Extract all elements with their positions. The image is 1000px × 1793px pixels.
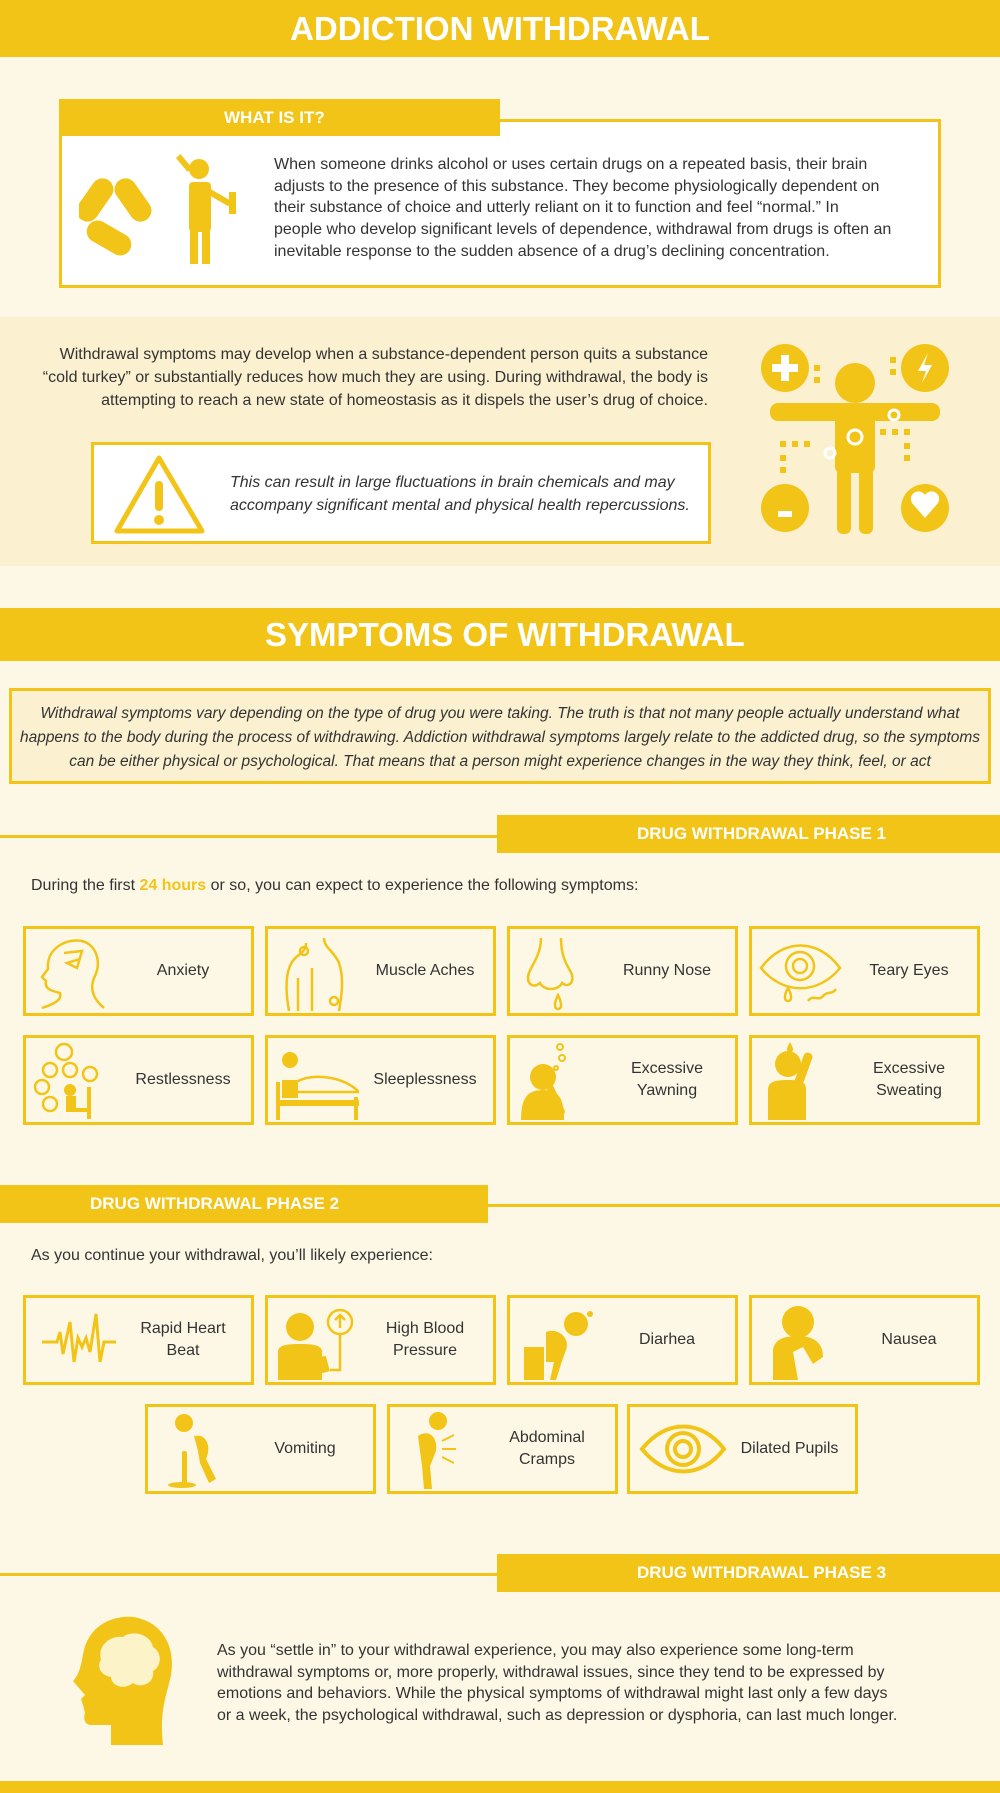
card: muscle aches: Muscle Aches [376,962,474,979]
heading: symptoms of withdrawal [0,608,1000,661]
text: withdrawal paragraph [43,346,708,409]
heading tab [59,99,500,136]
card: runny nose: Runny Nose [623,962,711,979]
text: withdrawal paragraph: Withdrawal symptoms may develop when a substance-dependent person quits a substance [60,346,708,363]
text: phase 1 intro: During the first 24 hours or so, you can expect to experience the following symptoms: [31,877,638,894]
text block: symptoms intro: Withdrawal symptoms vary depending on the type of drug you were taking. The truth is that not many people actually understand what [40,705,960,722]
text: what is it: people who develop significant levels of dependence, withdrawal from drugs is often an [274,221,891,238]
text: phase 3 [217,1642,897,1724]
callout: warning [91,442,711,544]
text: what is it: inevitable response to the sudden absence of a drug’s declining concentration. [274,243,830,260]
footer bar [0,1781,1000,1793]
symptom grid: phase 1 [23,926,980,1125]
card: excessive sweating: Sweating [876,1082,942,1099]
card: teary eyes: Teary Eyes [869,962,949,979]
card: muscle aches [265,926,496,1016]
text: phase 3: or a week, the psychological withdrawal, such as depression or dysphoria, can last much longer. [217,1707,897,1724]
text: what is it: When someone drinks alcohol or uses certain drugs on a repeated basis, their brain [274,156,867,173]
title bar: ADDICTION WITHDRAWAL [290,10,710,47]
card: dilated pupils [627,1404,858,1494]
card: vomiting [145,1404,376,1494]
text: phase 2 intro: As you continue your withdrawal, you’ll likely experience: [31,1247,433,1264]
heading tab: WHAT IS IT? [224,108,325,127]
card: excessive sweating: Excessive [873,1060,945,1077]
heading: phase 2 [0,1185,1000,1223]
card: teary eyes [749,926,980,1016]
card: rapid heart beat [23,1295,254,1385]
card: abdominal cramps: Cramps [519,1451,575,1468]
heading: symptoms of withdrawal: SYMPTOMS OF WITHDRAWAL [265,616,745,653]
title bar [0,0,1000,57]
card: rapid heart beat: Beat [167,1342,199,1359]
card: nausea [749,1295,980,1385]
card: abdominal cramps [387,1404,618,1494]
text: callout: accompany significant mental and physical health repercussions. [230,497,690,514]
card: rapid heart beat: Rapid Heart [140,1320,226,1337]
panel: what is it [59,99,941,288]
card: vomiting: Vomiting [274,1440,336,1457]
text: withdrawal paragraph: attempting to reach a new state of homeostasis as it dispels the user’s drug of choice. [101,392,708,409]
card: high blood pressure: Pressure [393,1342,457,1359]
text: what is it: their substance of choice and utterly reliant on it to function and feel “normal.” In [274,199,839,216]
text block: symptoms intro [9,688,991,784]
text: callout [230,474,690,514]
text: what is it [274,156,891,260]
card: diarhea [507,1295,738,1385]
icon: head with brain [73,1616,172,1745]
heading: phase 3: DRUG WITHDRAWAL PHASE 3 [637,1563,886,1582]
text block: symptoms intro: can be either physical or psychological. That means that a person might experience changes in the way they think, feel, or act [69,753,931,770]
card: anxiety: Anxiety [157,962,209,979]
text: what is it: adjusts to the presence of this substance. They become physiologically dependent on [274,178,879,195]
icon: warning triangle [114,456,204,534]
icon: pills and drinker [79,154,236,264]
text: phase 3: emotions and behaviors. While the physical symptoms of withdrawal might last only a few days [217,1685,888,1702]
panel: withdrawal band [0,317,1000,566]
card: anxiety [23,926,254,1016]
text: phase 3: withdrawal symptoms or, more properly, withdrawal issues, since they tend to be expressed by [217,1664,885,1681]
heading: phase 3 [0,1554,1000,1592]
card: restlessness [23,1035,254,1125]
text: withdrawal paragraph: “cold turkey” or substantially reduces how much they are using. During withdrawal, the body is [43,369,708,386]
card: diarhea: Diarhea [639,1331,695,1348]
text: callout: This can result in large fluctuations in brain chemicals and may [230,474,675,491]
heading: phase 1 [0,815,1000,853]
symptom grid: phase 2 [23,1295,980,1494]
text block: symptoms intro: happens to the body during the process of withdrawing. Addiction withdrawal symptoms largely relate to the addicted drug, so the symptoms [20,729,980,746]
card: high blood pressure [265,1295,496,1385]
card: restlessness: Restlessness [135,1071,231,1088]
card: excessive sweating [749,1035,980,1125]
box border [59,119,941,288]
card: sleeplessness [265,1035,496,1125]
card: runny nose [507,926,738,1016]
card: nausea: Nausea [881,1331,937,1348]
icon: body figure [761,344,949,534]
card: excessive yawning [507,1035,738,1125]
text: phase 3: As you “settle in” to your withdrawal experience, you may also experience some long-term [217,1642,854,1659]
card: sleeplessness: Sleeplessness [373,1071,477,1088]
card: excessive yawning: Yawning [637,1082,697,1099]
heading: phase 1: DRUG WITHDRAWAL PHASE 1 [637,824,886,843]
heading: phase 2: DRUG WITHDRAWAL PHASE 2 [90,1194,339,1213]
card: dilated pupils: Dilated Pupils [741,1440,838,1457]
card: abdominal cramps: Abdominal [509,1429,585,1446]
card: excessive yawning: Excessive [631,1060,703,1077]
card: high blood pressure: High Blood [386,1320,464,1337]
